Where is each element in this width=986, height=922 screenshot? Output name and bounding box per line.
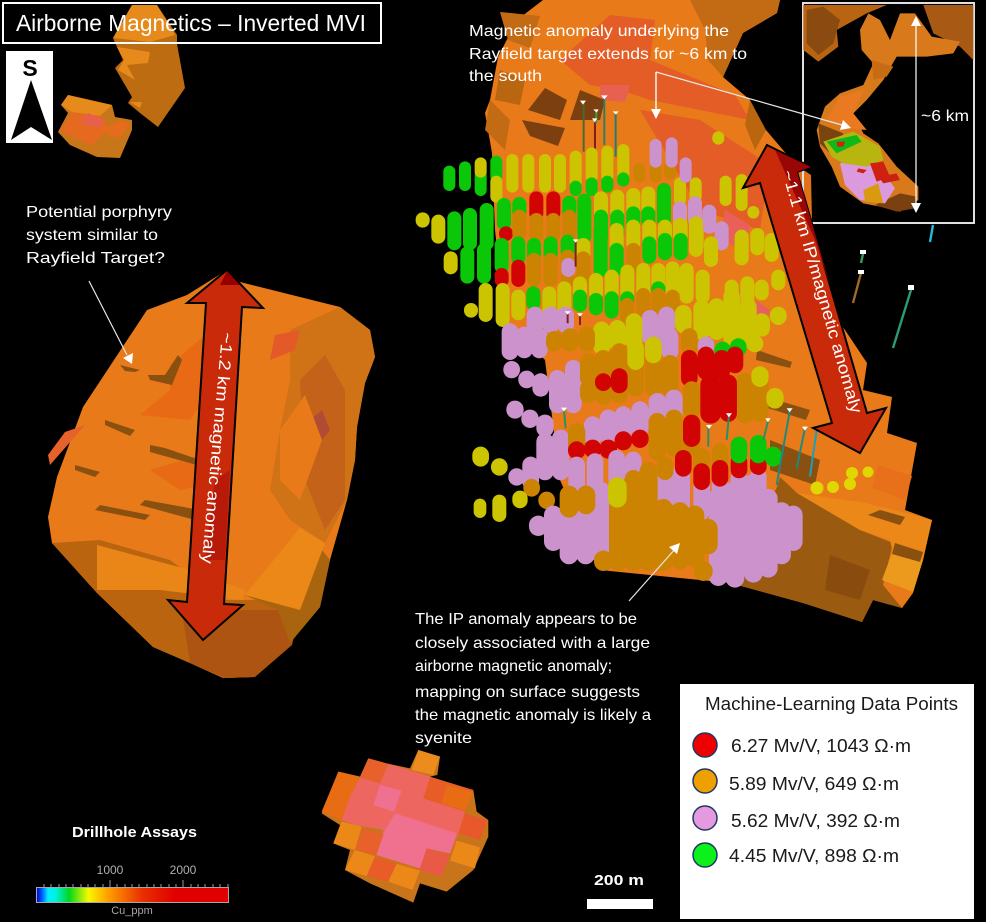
colour bar: drillhole assays: 2000 — [170, 863, 197, 877]
colour bar: drillhole assays: 1000 — [97, 863, 124, 877]
data point rows: seventh — [515, 375, 775, 472]
data point rows: eighth — [481, 443, 773, 513]
colour bar: drillhole assays — [36, 824, 228, 917]
callout: IP anomaly association: mapping on surface suggests — [415, 684, 640, 701]
arrow: 1.2 km magnetic anomaly — [168, 270, 263, 640]
callout: magnetic anomaly underlying Rayfield: Rayfield target extends for ~6 km to — [469, 46, 747, 63]
callout: IP anomaly association: airborne magnetic anomaly; — [415, 658, 612, 675]
callout: IP anomaly association: syenite — [415, 730, 472, 747]
legend item: 4.45: 4.45 Mv/V, 898 Ω·m — [729, 846, 899, 866]
legend item: 6.27 — [693, 733, 911, 757]
inset: 6 km magnetic body — [803, 5, 973, 212]
arrow: porphyry callout leader — [89, 281, 133, 364]
icon: north arrow pointing south: S — [22, 55, 38, 81]
legend item: 5.62 — [693, 806, 900, 831]
magnetic body: large left anomaly — [48, 270, 375, 678]
callout: potential porphyry system — [26, 204, 172, 267]
callout: magnetic anomaly underlying Rayfield — [469, 23, 747, 85]
magnetic body: central Rayfield anomaly — [485, 0, 932, 622]
magnetic body: top-left small block — [58, 95, 132, 158]
callout: magnetic anomaly underlying Rayfield: Magnetic anomaly underlying the — [469, 23, 729, 40]
callout: IP anomaly association: closely associated with a large — [415, 635, 650, 652]
data point rows: sixth — [512, 337, 735, 405]
callout: potential porphyry system: Rayfield Target? — [26, 250, 165, 267]
drillholes right of main anomaly — [853, 225, 933, 348]
callout: IP anomaly association: the magnetic anomaly is likely a — [415, 707, 651, 724]
legend item: 5.89 — [693, 769, 899, 794]
inset label: ~6 km: ~6 km — [921, 108, 969, 125]
title: Airborne Magnetics – Inverted MVI — [16, 10, 366, 36]
legend item: 5.89: 5.89 Mv/V, 649 Ω·m — [729, 774, 899, 794]
inset map — [803, 3, 974, 223]
arrow label: ~1.1 km IP/magnetic anomaly: ~1.1 km IP/magnetic anomaly — [778, 168, 865, 416]
callout: potential porphyry system: system similar to — [26, 227, 158, 244]
icon: north arrow pointing south — [6, 51, 53, 143]
data point rows: third — [451, 223, 778, 293]
colour bar: drillhole assays: Cu_ppm — [111, 905, 153, 917]
callout: IP anomaly association: The IP anomaly appears to be — [415, 611, 637, 628]
legend item: 6.27: 6.27 Mv/V, 1043 Ω·m — [731, 736, 911, 756]
legend: machine-learning data points — [680, 684, 974, 919]
inset arrow: 6 km extent — [911, 16, 921, 213]
title — [3, 3, 381, 43]
arrow: leader to inset — [656, 72, 851, 130]
colour bar: drillhole assays: Drillhole Assays — [72, 824, 197, 841]
data point rows: fourth — [471, 268, 778, 322]
data point rows: fifth — [510, 297, 778, 352]
callout: IP anomaly association — [415, 611, 651, 747]
magnetic body: bottom anomaly — [322, 750, 488, 903]
legend item: 5.62: 5.62 Mv/V, 392 Ω·m — [731, 811, 900, 831]
arrow: leader down to Rayfield target — [651, 72, 661, 119]
data point rows: front — [480, 473, 793, 578]
scattered yellow data points — [810, 466, 874, 494]
arrow: IP anomaly leader — [629, 543, 680, 601]
drillholes behind data points — [580, 95, 619, 157]
legend item: 4.45 — [693, 843, 899, 867]
data point rows: second — [423, 190, 722, 247]
arrow: 1.1 km IP/magnetic anomaly — [743, 145, 886, 453]
data point rows: back — [449, 137, 753, 213]
lower-right brown flank — [730, 477, 902, 622]
machine-learning data points — [423, 137, 793, 578]
arrow label: ~1.2 km magnetic anomaly: ~1.2 km magnetic anomaly — [198, 332, 236, 565]
scale bar: 200 m — [587, 872, 653, 909]
callout: magnetic anomaly underlying Rayfield: the south — [469, 68, 542, 85]
callout: potential porphyry system: Potential porphyry — [26, 204, 172, 221]
magnetic body: top-left tall block — [113, 5, 185, 127]
main anomaly edge showing through inset corner — [796, 165, 812, 222]
legend: machine-learning data points: Machine-Learning Data Points — [705, 694, 958, 714]
drillholes in front of data points — [561, 239, 817, 485]
scale bar: 200 m: 200 m — [594, 872, 644, 889]
